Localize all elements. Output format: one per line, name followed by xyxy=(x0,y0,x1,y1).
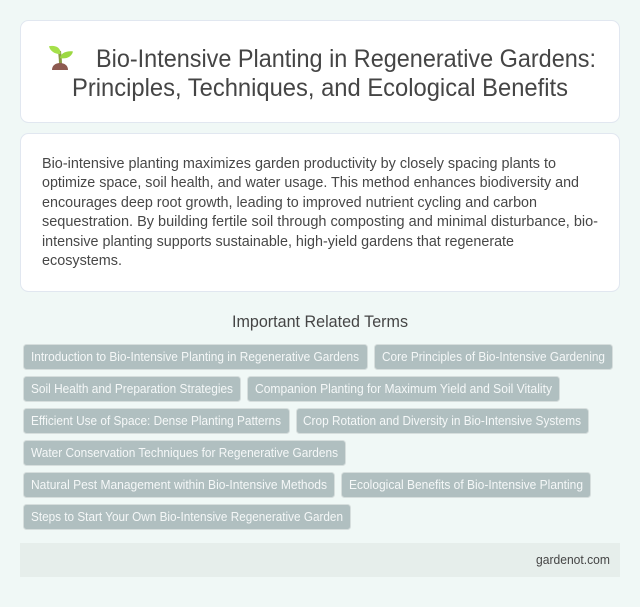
related terms chips xyxy=(24,344,612,530)
panel: introduction xyxy=(20,134,620,292)
chip xyxy=(342,472,590,498)
chip: Efficient Use of Space: Dense Planting Patterns xyxy=(31,413,281,428)
chip: Steps to Start Your Own Bio-Intensive Regenerative Garden xyxy=(31,509,343,524)
chip xyxy=(24,408,290,434)
text line: sequestration. By building fertile soil through composting and minimal disturbance, bio- xyxy=(42,213,598,230)
chip: Core Principles of Bio-Intensive Gardening xyxy=(382,349,605,364)
chip: Companion Planting for Maximum Yield and Soil Vitality xyxy=(255,381,553,396)
text line: ecosystems. xyxy=(42,252,122,269)
icon: seedling xyxy=(49,46,73,70)
chip xyxy=(248,376,560,402)
panel: title xyxy=(20,20,620,122)
heading: related terms: Important Related Terms xyxy=(232,312,408,331)
chip xyxy=(296,408,588,434)
chip xyxy=(24,472,334,498)
footer source: gardenot.com xyxy=(536,552,610,567)
chip xyxy=(24,504,350,530)
chip xyxy=(24,376,240,402)
chip: Soil Health and Preparation Strategies xyxy=(31,381,233,396)
chip: Crop Rotation and Diversity in Bio-Intensive Systems xyxy=(303,413,581,428)
text line: encourages deep root growth, leading to improved nutrient cycling and carbon xyxy=(42,194,537,211)
text line: Bio-intensive planting maximizes garden productivity by closely spacing plants to xyxy=(42,155,556,172)
text line: optimize space, soil health, and water usage. This method enhances biodiversity and xyxy=(42,174,579,191)
chip: Introduction to Bio-Intensive Planting in Regenerative Gardens xyxy=(31,349,359,364)
chip: Water Conservation Techniques for Regenerative Gardens xyxy=(31,445,338,460)
title line 2: Principles, Techniques, and Ecological Benefits xyxy=(72,75,568,102)
chip: Ecological Benefits of Bio-Intensive Planting xyxy=(349,477,583,492)
text line: intensive planting supports sustainable, high-yield gardens that regenerate xyxy=(42,233,514,250)
footer xyxy=(20,543,620,577)
chip xyxy=(24,440,346,466)
chip xyxy=(374,344,612,370)
chip xyxy=(24,344,368,370)
title line 1: Bio-Intensive Planting in Regenerative Gardens: xyxy=(96,46,596,73)
chip: Natural Pest Management within Bio-Intensive Methods xyxy=(31,477,327,492)
